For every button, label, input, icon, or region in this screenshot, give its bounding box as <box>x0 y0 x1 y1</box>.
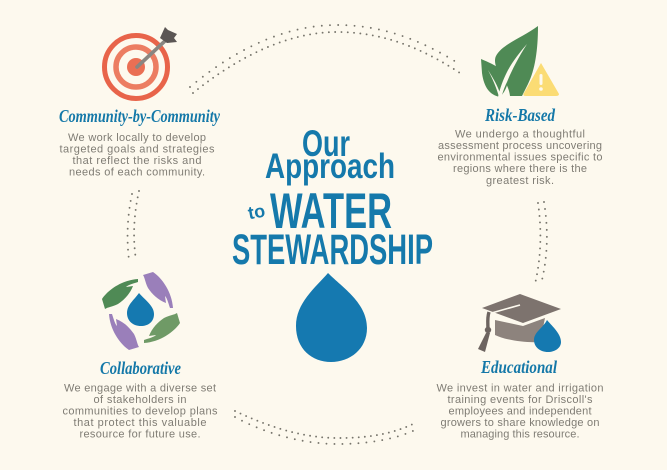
text: educational: training events for Driscoll's <box>448 394 593 406</box>
heading: educational: Educational <box>480 357 557 377</box>
icon: leaves with warning triangle <box>481 26 559 98</box>
text: community-by-community: targeted goals and strategies <box>60 144 215 156</box>
text: community-by-community <box>60 132 215 178</box>
icon: graduation cap with water drop <box>478 294 561 352</box>
icon: target with arrow <box>104 27 177 98</box>
title: Our <box>302 123 350 164</box>
dotted arc: top <box>190 25 461 93</box>
text: community-by-community: needs of each community. <box>69 166 205 178</box>
icon: large water drop <box>296 273 367 362</box>
panel: collaborative <box>62 272 218 440</box>
title: Approach <box>265 147 395 186</box>
text: risk-based: greatest risk. <box>486 175 554 187</box>
text: collaborative: that protect this valuable <box>74 417 206 429</box>
text: community-by-community: that reflect the risks and <box>72 155 202 167</box>
text: risk-based: assessment process uncovering <box>438 140 602 152</box>
text: risk-based: environmental issues specific to <box>438 152 602 164</box>
text: educational: growers to share knowledge on <box>440 417 600 429</box>
text: educational: employees and independent <box>448 406 592 418</box>
heading: risk-based: Risk-Based <box>484 105 556 125</box>
dotted arc: bottom <box>235 411 417 444</box>
title: STEWARDSHIP <box>232 226 433 274</box>
icon: hands around water drop <box>102 272 180 350</box>
text: risk-based <box>438 128 602 187</box>
text: risk-based: We undergo a thoughtful <box>455 128 585 140</box>
text: collaborative <box>62 382 218 440</box>
text: collaborative: of stakeholders in <box>94 394 186 406</box>
text: collaborative: resource for future use. <box>80 428 200 440</box>
text: educational: We invest in water and irrigation <box>436 382 604 394</box>
heading: community-by-community: Community-by-Community <box>59 106 221 126</box>
dotted arc: left <box>128 191 139 260</box>
panel: educational <box>436 294 604 440</box>
title: WATER <box>270 183 392 239</box>
title: to <box>246 201 267 223</box>
title <box>232 123 433 274</box>
panel: risk-based <box>438 26 602 187</box>
text: educational: managing this resource. <box>460 428 580 440</box>
panel: community-by-community <box>59 27 221 178</box>
text: community-by-community: We work locally to develop <box>68 132 206 144</box>
text: educational <box>436 382 604 440</box>
text: risk-based: regions where there is the <box>453 163 587 175</box>
text: collaborative: We engage with a diverse set <box>64 382 216 394</box>
dotted arc: right <box>535 202 547 284</box>
text: collaborative: communities to develop plans <box>62 406 218 418</box>
heading: collaborative: Collaborative <box>100 358 181 378</box>
